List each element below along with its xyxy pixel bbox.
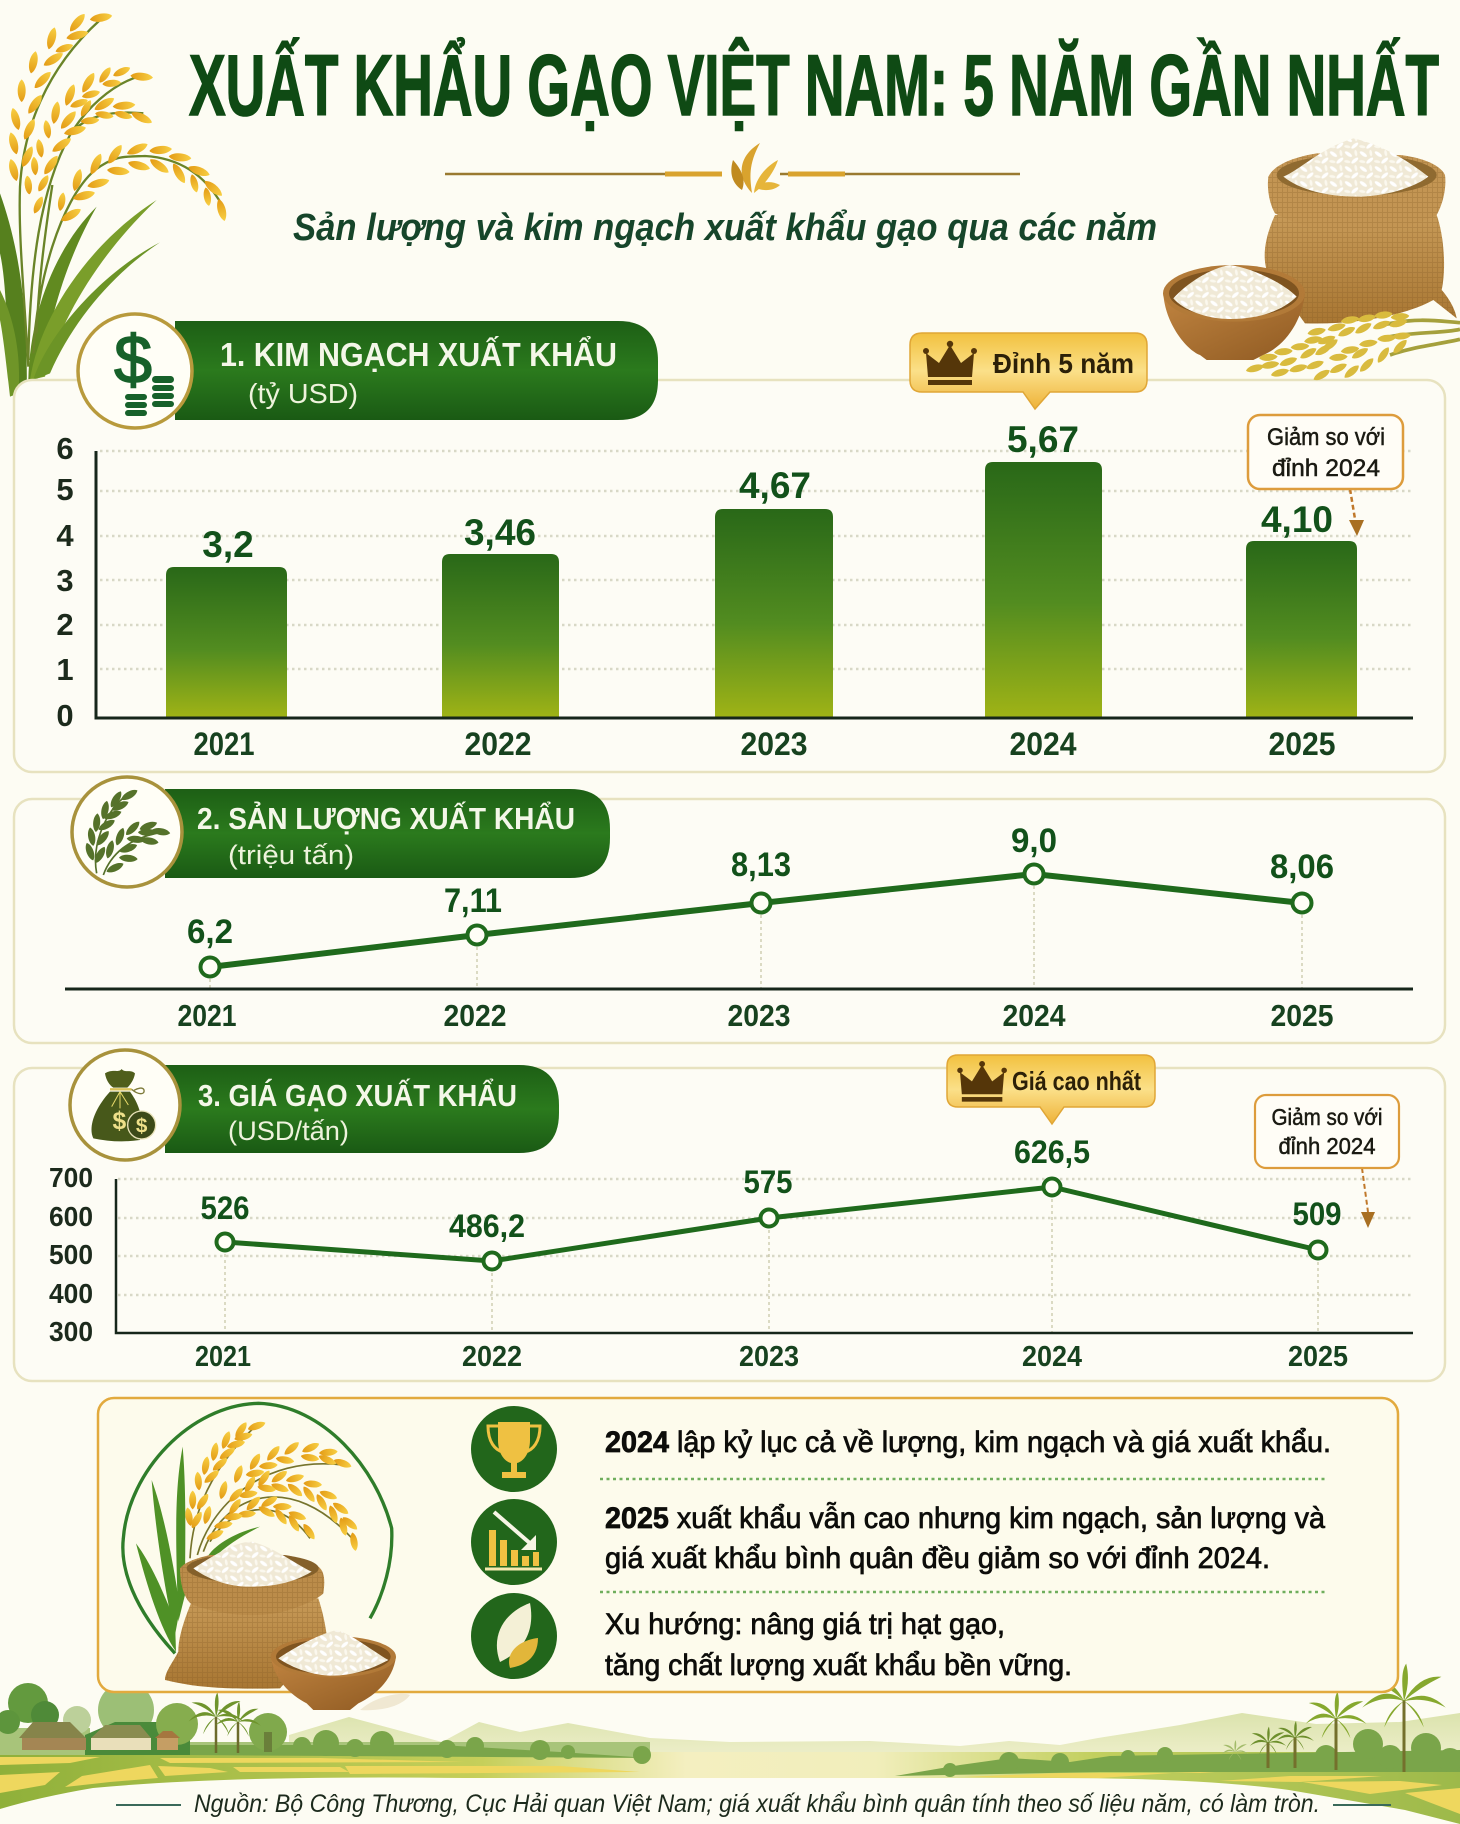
y axis labels xyxy=(56,431,74,733)
bar values xyxy=(202,419,1333,565)
tree lines xyxy=(185,1729,1460,1777)
bar values: 4,67 xyxy=(739,465,811,506)
data values: 509 xyxy=(1292,1196,1342,1232)
header: export volume xyxy=(72,777,610,887)
text: 2025 decline: 2025 xuất khẩu vẫn cao nhưng kim ngạch, sản lượng và xyxy=(605,1502,1325,1535)
panel: export price xyxy=(14,1050,1445,1381)
icon: dollar coins xyxy=(78,314,192,428)
badge: 5-year peak xyxy=(910,333,1147,409)
callout: decline from 2024 peak: đỉnh 2024 xyxy=(1272,455,1380,482)
badge: highest price xyxy=(947,1055,1155,1124)
panel: export value xyxy=(14,380,1445,772)
header: export price: 3. GIÁ GẠO XUẤT KHẨU xyxy=(198,1078,517,1113)
icon: money bag xyxy=(70,1050,180,1160)
year labels: 2024 xyxy=(1010,726,1077,762)
text: 2024 record: 2024 lập kỷ lục cả về lượng, kim ngạch và giá xuất khẩu. xyxy=(605,1426,1331,1459)
village houses xyxy=(19,1722,180,1750)
year labels: 2022 xyxy=(462,1341,522,1373)
rice plant top left xyxy=(0,11,228,397)
year labels xyxy=(194,726,1336,762)
leaves xyxy=(0,193,160,397)
icon: dollar coins: $ xyxy=(114,322,152,398)
icon: rice grain xyxy=(471,1593,557,1679)
text: trend xyxy=(605,1608,1072,1682)
y axis labels: 6 xyxy=(56,431,74,466)
callout: decline from 2024 peak xyxy=(1248,415,1403,536)
data points xyxy=(200,864,1312,976)
data values: 575 xyxy=(744,1164,792,1200)
y axis labels: 600 xyxy=(49,1201,93,1232)
year labels: 2025 xyxy=(1288,1341,1348,1373)
data values: 8,06 xyxy=(1270,848,1334,886)
panicle grains xyxy=(184,1420,359,1551)
stems xyxy=(190,1425,355,1558)
bowl of rice xyxy=(1163,265,1305,360)
y axis labels xyxy=(49,1162,93,1347)
year labels xyxy=(178,998,1334,1033)
panel: key takeaways xyxy=(98,1398,1398,1710)
data values: 6,2 xyxy=(187,913,233,951)
year labels: 2023 xyxy=(739,1341,799,1373)
rice sack xyxy=(1265,138,1457,324)
village trees xyxy=(0,1682,287,1755)
icon: falling bars xyxy=(471,1499,557,1585)
year labels xyxy=(195,1341,1348,1373)
y axis labels: 0 xyxy=(56,698,74,733)
year labels: 2025 xyxy=(1270,998,1334,1033)
title divider with rice sprig xyxy=(445,143,1020,193)
year labels: 2024 xyxy=(1022,1341,1082,1373)
line chart: export volume xyxy=(65,822,1413,1033)
y axis labels: 500 xyxy=(49,1239,93,1270)
bowl of rice xyxy=(271,1630,410,1710)
stems xyxy=(20,20,222,367)
text: 2025 decline: giá xuất khẩu bình quân đều giảm so với đỉnh 2024. xyxy=(605,1542,1270,1575)
rice sack and bowl top right xyxy=(1163,138,1460,383)
callout: decline from 2024 peak: Giảm so với xyxy=(1267,424,1385,451)
y axis labels: 300 xyxy=(49,1316,93,1347)
bar values: 5,67 xyxy=(1007,419,1079,460)
y axis labels: 3 xyxy=(56,563,74,598)
data values: 526 xyxy=(200,1190,250,1226)
data points xyxy=(216,1178,1326,1270)
landscape xyxy=(0,1664,1460,1824)
badge: highest price: Giá cao nhất xyxy=(1012,1066,1141,1096)
icon: money bag: $ xyxy=(112,1108,126,1135)
data values: 8,13 xyxy=(731,846,791,884)
rice fields xyxy=(0,1752,1460,1824)
year labels: 2021 xyxy=(195,1341,251,1373)
data values: 7,11 xyxy=(444,882,502,920)
callout: price decline xyxy=(1255,1095,1399,1228)
header: export price xyxy=(70,1050,559,1160)
distant mountains xyxy=(289,1713,1460,1775)
data values xyxy=(200,1134,1342,1244)
illustration: rice sack, bowl and stalks xyxy=(123,1403,410,1710)
icon: trophy xyxy=(471,1406,557,1492)
source note: Nguồn: Bộ Công Thương, Cục Hải quan Việt Nam; giá xuất khẩu bình quân tính theo số liệu năm, có làm tròn. xyxy=(194,1790,1320,1818)
icon: rice sprig xyxy=(72,777,182,887)
data values xyxy=(187,822,1334,951)
panel: export volume xyxy=(14,777,1445,1043)
bars xyxy=(166,462,1357,717)
line chart: export price xyxy=(49,1134,1413,1373)
green ring xyxy=(123,1403,392,1653)
header: export value: (tỷ USD) xyxy=(248,378,358,409)
bar values: 3,46 xyxy=(464,512,536,553)
header: export value: 1. KIM NGẠCH XUẤT KHẨU xyxy=(220,336,617,373)
panicle grains xyxy=(7,11,228,224)
y axis labels: 400 xyxy=(49,1278,93,1309)
year labels: 2022 xyxy=(464,726,532,762)
year labels: 2021 xyxy=(194,726,254,762)
callout: price decline: đỉnh 2024 xyxy=(1278,1133,1376,1159)
rice sack xyxy=(165,1542,327,1689)
badge: 5-year peak: Đỉnh 5 năm xyxy=(993,348,1134,379)
year labels: 2023 xyxy=(728,998,790,1033)
icon: money bag: $ xyxy=(136,1115,148,1138)
header: export volume: (triệu tấn) xyxy=(228,840,354,870)
year labels: 2024 xyxy=(1002,998,1066,1033)
data values: 626,5 xyxy=(1014,1134,1090,1170)
text: 2025 decline xyxy=(605,1502,1325,1575)
bar values: 3,2 xyxy=(202,524,254,565)
year labels: 2022 xyxy=(444,998,506,1033)
year labels: 2023 xyxy=(740,726,808,762)
year labels: 2021 xyxy=(178,998,236,1033)
bar chart: export value xyxy=(56,419,1413,762)
y axis labels: 700 xyxy=(49,1162,93,1193)
bar values: 4,10 xyxy=(1261,499,1333,540)
palm trees xyxy=(189,1664,1446,1772)
y axis labels: 1 xyxy=(56,652,74,687)
y axis labels: 4 xyxy=(56,518,74,553)
header: export price: (USD/tấn) xyxy=(228,1116,349,1146)
data values: 9,0 xyxy=(1011,822,1057,860)
header: export volume: 2. SẢN LƯỢNG XUẤT KHẨU xyxy=(197,801,575,836)
leaves xyxy=(136,1447,260,1652)
text: trend: Xu hướng: nâng giá trị hạt gạo, xyxy=(605,1608,1005,1641)
golden wheat ears xyxy=(1245,310,1460,383)
y axis labels: 5 xyxy=(56,472,74,507)
data values: 486,2 xyxy=(449,1208,525,1244)
year labels: 2025 xyxy=(1268,726,1336,762)
subtitle: Sản lượng và kim ngạch xuất khẩu gạo qua các năm xyxy=(293,207,1157,249)
header: export value xyxy=(78,314,658,428)
callout: price decline: Giảm so với xyxy=(1272,1104,1382,1130)
y axis labels: 2 xyxy=(56,607,74,642)
text: trend: tăng chất lượng xuất khẩu bền vững. xyxy=(605,1649,1072,1682)
